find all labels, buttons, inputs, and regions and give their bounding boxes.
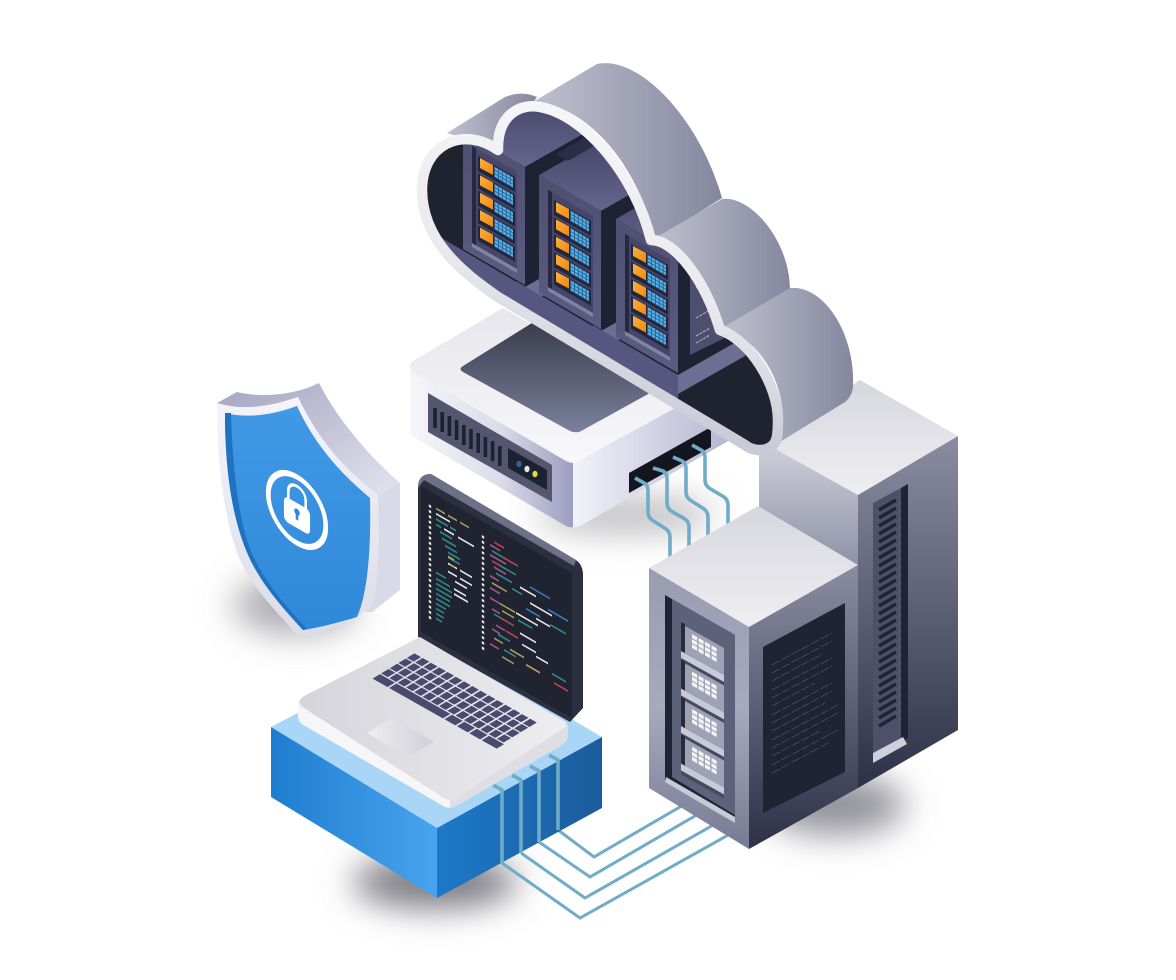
servers inside cloud (440, 94, 745, 404)
blue platform (271, 640, 602, 898)
lock badge (268, 460, 326, 560)
router left face (410, 367, 573, 527)
floor wires from base to server (502, 804, 730, 918)
code lines (430, 505, 568, 699)
laptop (298, 474, 583, 808)
laptop deck edge (298, 700, 568, 808)
router base unit (410, 308, 735, 527)
cabinet door (665, 595, 735, 823)
cloud back lobes (447, 94, 537, 150)
shield extrusion (217, 383, 400, 495)
router port (629, 427, 711, 493)
shield blue face (225, 406, 370, 630)
cloud interior (422, 106, 778, 450)
front server cabinet (649, 506, 858, 849)
wires from router (635, 445, 728, 560)
platform wires (493, 755, 558, 864)
shield rim (217, 397, 379, 638)
illustration: cloud server security (217, 63, 958, 932)
cloud rim (422, 106, 778, 450)
router top pad (460, 323, 650, 432)
cabinet code screen (763, 603, 845, 813)
keyboard (376, 656, 535, 746)
tower vent slats (879, 500, 896, 726)
router right face (573, 405, 735, 527)
side panel of third rack (690, 277, 725, 355)
router status panel (508, 448, 547, 490)
security shield (217, 383, 400, 638)
drop shadows (233, 497, 905, 908)
cloud (422, 63, 853, 450)
laptop deck (300, 637, 566, 800)
router vent panel (428, 393, 552, 502)
touchpad (367, 717, 434, 757)
back server tower (759, 380, 958, 788)
router top (410, 308, 677, 463)
laptop screen (418, 474, 583, 722)
